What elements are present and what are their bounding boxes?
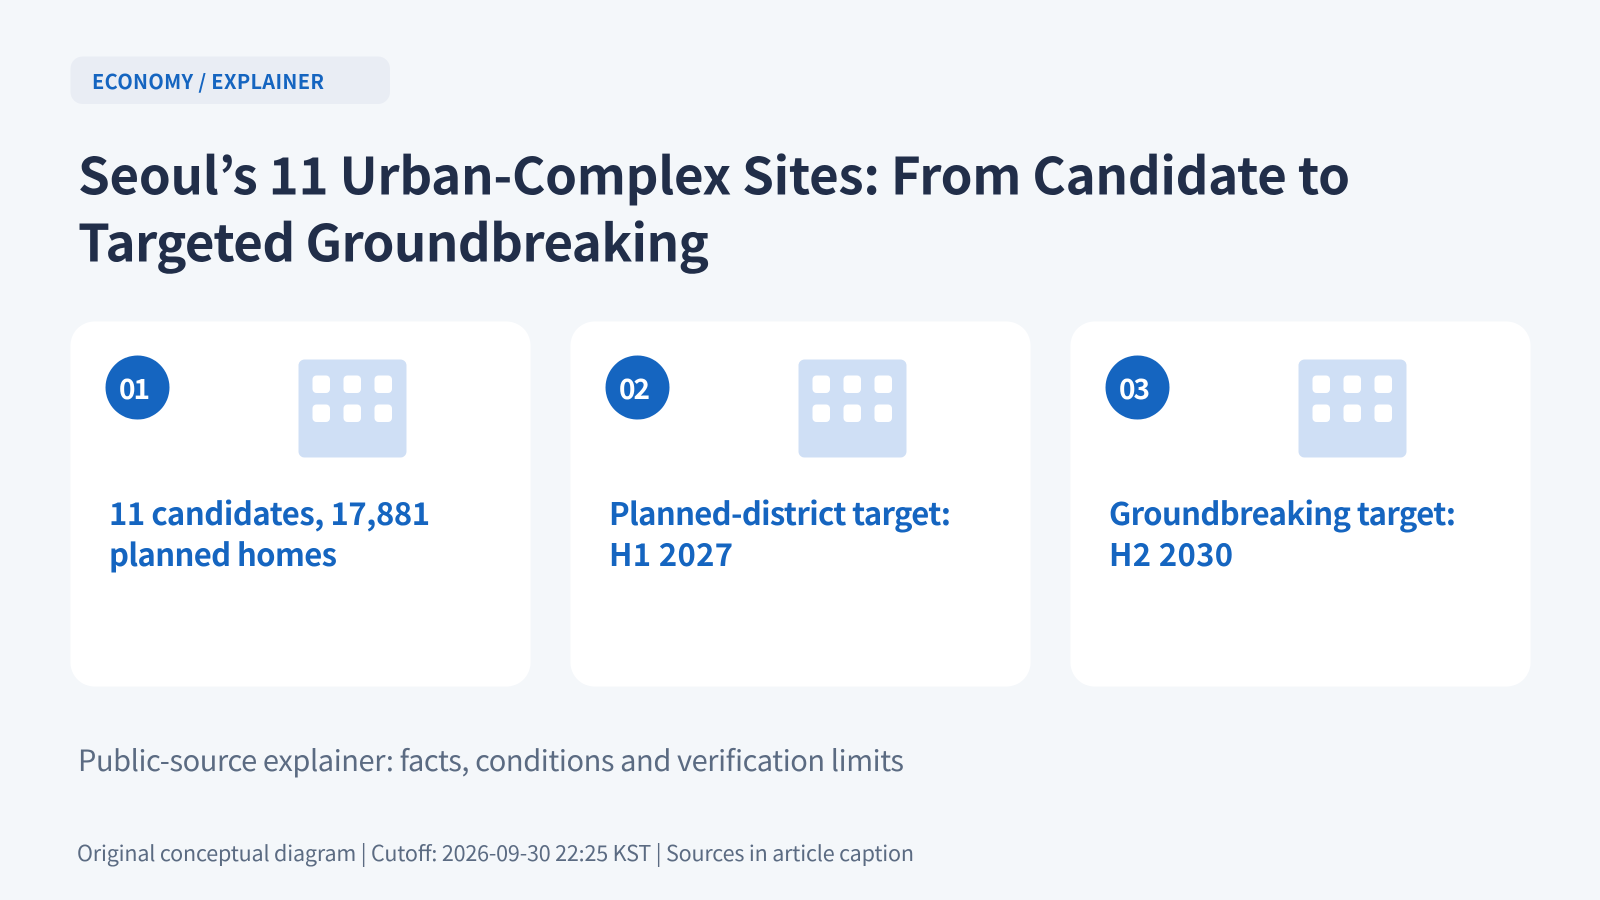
panel: step 02: [570, 322, 1030, 686]
subtitle: Public-source explainer: facts, conditions and verification limits: [78, 738, 904, 780]
step 01 label: planned homes: [109, 530, 337, 575]
step 03 label: H2 2030: [1109, 530, 1233, 575]
step 02 label: [609, 489, 951, 575]
icon: building: [798, 360, 906, 458]
number badge 02: [606, 356, 670, 420]
step 02 label: H1 2027: [609, 530, 733, 575]
category tag: [70, 56, 390, 104]
step 01 label: [109, 489, 430, 575]
step 02 label: Planned-district target:: [609, 489, 951, 534]
icon: building: [1298, 360, 1406, 458]
title: [78, 136, 1350, 276]
number badge 03: 03: [1119, 368, 1150, 408]
icon: building: [298, 360, 406, 458]
step 03 label: Groundbreaking target:: [1109, 489, 1456, 534]
category tag: ECONOMY / EXPLAINER: [92, 66, 324, 95]
step 03 label: [1109, 489, 1456, 575]
panel: step 01: [70, 322, 530, 686]
number badge 01: 01: [119, 368, 150, 408]
panel: step 03: [1070, 322, 1530, 686]
title: Seoul’s 11 Urban-Complex Sites: From Candidate to: [78, 136, 1350, 210]
number badge 02: 02: [619, 368, 650, 408]
number badge 03: [1106, 356, 1170, 420]
number badge 01: [106, 356, 170, 420]
title: Targeted Groundbreaking: [78, 202, 709, 276]
footer note: Original conceptual diagram | Cutoff: 2026-09-30 22:25 KST | Sources in article caption: [77, 837, 914, 868]
step 01 label: 11 candidates, 17,881: [109, 489, 430, 534]
